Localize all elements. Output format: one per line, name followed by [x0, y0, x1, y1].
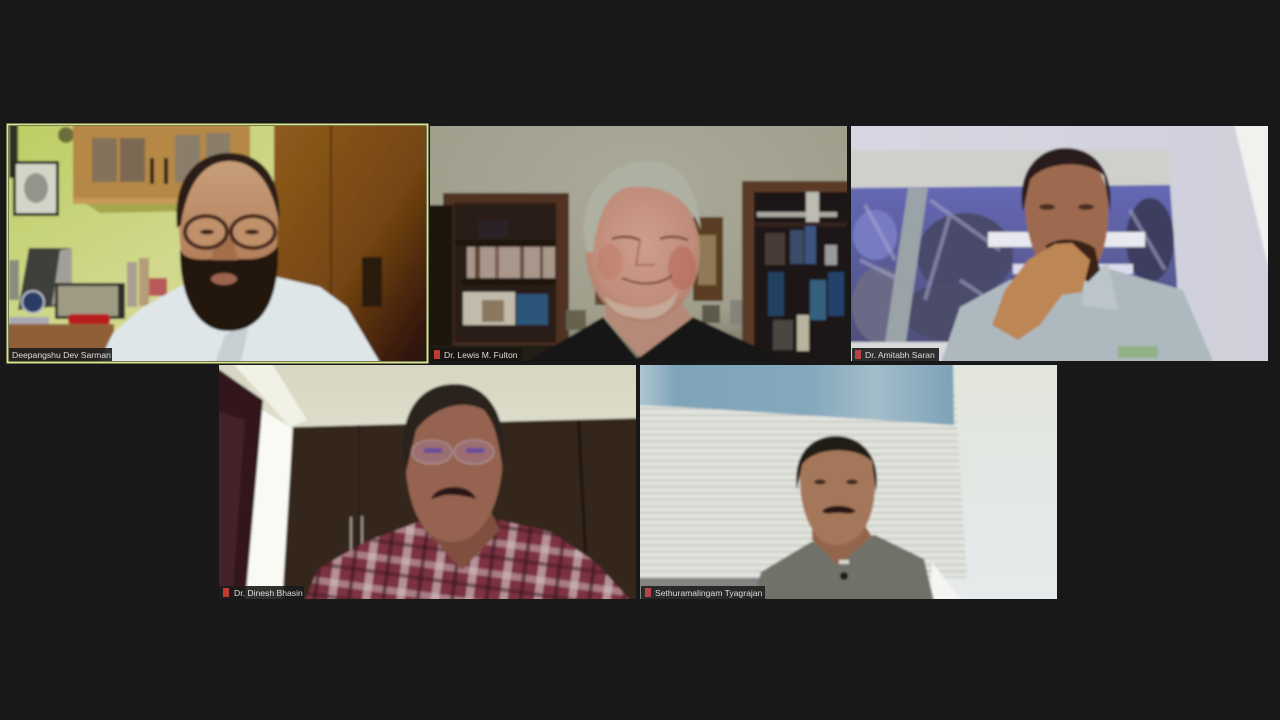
window blind [846, 150, 1170, 188]
active speaker border [8, 124, 428, 362]
window with palm trees [846, 185, 1177, 352]
name label [852, 348, 939, 361]
person: man with glasses and plaid shirt [303, 384, 635, 605]
panel: Sethuramalingam Tyagrajan video tile [635, 360, 1063, 605]
picture behind head [566, 217, 754, 330]
name label [219, 586, 304, 599]
person: man with hand on chin [940, 148, 1215, 366]
panel: Dr. Lewis M. Fulton video tile [425, 120, 853, 366]
person: man with moustache and grey vest [752, 436, 965, 605]
name label: Sethuramalingam Tyagrajan [655, 588, 763, 598]
right bookshelf [742, 181, 853, 366]
person: speaker with beard and glasses [97, 153, 382, 366]
name label: Dr. Lewis M. Fulton [444, 350, 518, 360]
panel: Dr. Dinesh Bhasin video tile [214, 360, 642, 605]
panel: Deepangshu Dev Sarman video tile [4, 120, 432, 366]
name label: Dr. Dinesh Bhasin [234, 588, 303, 598]
left bookshelf [425, 193, 570, 365]
dark wardrobe [282, 418, 642, 605]
wall pictures [9, 120, 74, 216]
name label [430, 348, 522, 361]
name label: Dr. Amitabh Saran [865, 350, 935, 360]
desk objects [4, 248, 167, 366]
white wall strip and door [214, 366, 292, 605]
panel: Dr. Amitabh Saran video tile [846, 120, 1274, 366]
name label: Deepangshu Dev Sarman [12, 350, 111, 360]
window blinds [635, 360, 967, 605]
wall cabinet [73, 120, 250, 213]
name label [641, 586, 765, 599]
person: smiling man with grey hair [530, 162, 756, 361]
